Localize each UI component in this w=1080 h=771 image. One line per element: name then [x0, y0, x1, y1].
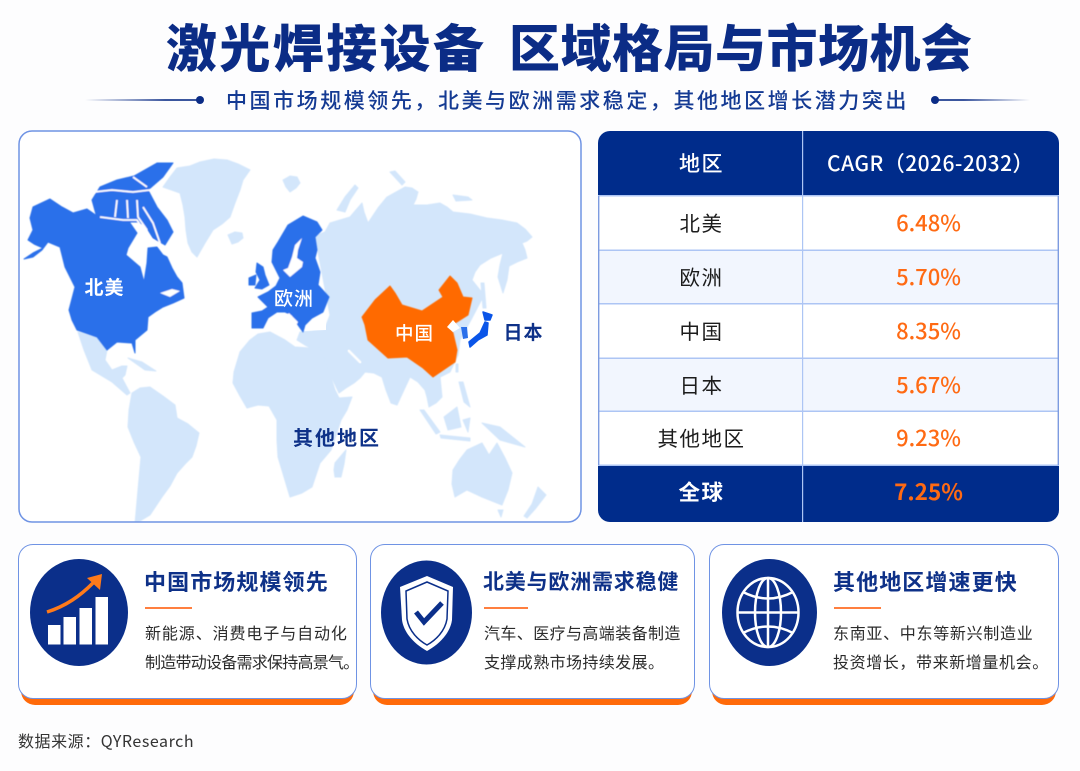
title: 激光焊接设备 [166, 8, 486, 82]
row: 日本 [598, 358, 1059, 411]
seas cut into the light land [348, 350, 361, 363]
row: 北美: 6.48% [896, 206, 961, 238]
Korea [461, 327, 468, 339]
row: 其他地区: 9.23% [896, 421, 961, 453]
gulf of St Lawrence [160, 289, 180, 297]
region: Europe [249, 216, 329, 332]
panel: world map [18, 130, 582, 523]
other regions: light landmasses [78, 159, 546, 524]
card: 北美与欧洲需求稳健 [370, 544, 695, 705]
row: 欧洲: 欧洲 [680, 261, 724, 291]
Baltic and Adriatic [283, 238, 303, 277]
row: 中国 [680, 314, 961, 346]
row: 全球 total: 全球 [678, 476, 724, 507]
icon: globe circle [722, 559, 817, 666]
row: 中国: 8.35% [896, 314, 961, 346]
title: 区域格局与市场机会 [509, 8, 973, 82]
region: Japan [469, 312, 492, 347]
region: China [362, 276, 472, 377]
icon: shield check circle [381, 560, 472, 664]
row: 北美: 北美 [680, 207, 724, 237]
card 2 heading: 北美与欧洲需求稳健 [483, 566, 679, 596]
subtitle: 中国市场规模领先，北美与欧洲需求稳定，其他地区增长潜力突出 [226, 85, 909, 115]
icon: growth bars circle [30, 559, 128, 666]
row: 全球 total [598, 465, 1059, 522]
row: 日本: 日本 [680, 368, 724, 398]
label: 其他地区: 其他地区 [293, 422, 381, 451]
card 2 text: 支撑成熟市场持续发展。 [484, 649, 664, 673]
card 1 text: 新能源、消费电子与自动化 [145, 620, 348, 644]
table header [598, 131, 1059, 196]
region: North America [24, 163, 184, 353]
card: 中国市场规模领先 [18, 544, 357, 705]
arctic channels [94, 177, 165, 250]
card 2 text: 汽车、医疗与高端装备制造 [484, 620, 681, 644]
card 1 text: 制造带动设备需求保持高景气。 [145, 649, 359, 673]
card 1 heading: 中国市场规模领先 [144, 565, 329, 597]
table header: 地区 [679, 148, 724, 178]
label: 北美: 北美 [84, 273, 125, 300]
label: 日本: 日本 [503, 318, 544, 345]
row: 日本: 5.67% [896, 368, 961, 400]
Bohai sea [447, 320, 460, 332]
row: 欧洲: 5.70% [896, 260, 961, 292]
card 2 divider [484, 607, 528, 609]
row: 全球 total: 7.25% [894, 475, 963, 507]
card 3 text: 东南亚、中东等新兴制造业 [833, 620, 1033, 644]
row: 中国: 中国 [680, 315, 724, 345]
label: 中国: 中国 [395, 320, 434, 346]
subtitle rule: right [931, 96, 1028, 104]
table header: CAGR（2026-2032） [827, 148, 1034, 178]
title [166, 8, 973, 82]
label: 欧洲: 欧洲 [274, 284, 314, 311]
card: 其他地区增速更快 [709, 544, 1059, 705]
card 3 heading: 其他地区增速更快 [833, 565, 1018, 597]
row: 欧洲 [598, 250, 1059, 304]
card 1 text [145, 620, 359, 673]
source note: 数据来源：QYResearch [18, 728, 194, 752]
card 3 text [833, 620, 1049, 673]
subtitle rule: left [88, 96, 204, 104]
row: 其他地区 [658, 421, 961, 453]
card 2 text [484, 620, 681, 673]
panel: CAGR table [598, 131, 1059, 522]
row: 其他地区: 其他地区 [658, 422, 746, 452]
card 3 divider [834, 607, 881, 609]
row: 北美 [680, 206, 961, 238]
card 1 divider [145, 607, 192, 609]
card 3 text: 投资增长，带来新增量机会。 [833, 649, 1049, 673]
